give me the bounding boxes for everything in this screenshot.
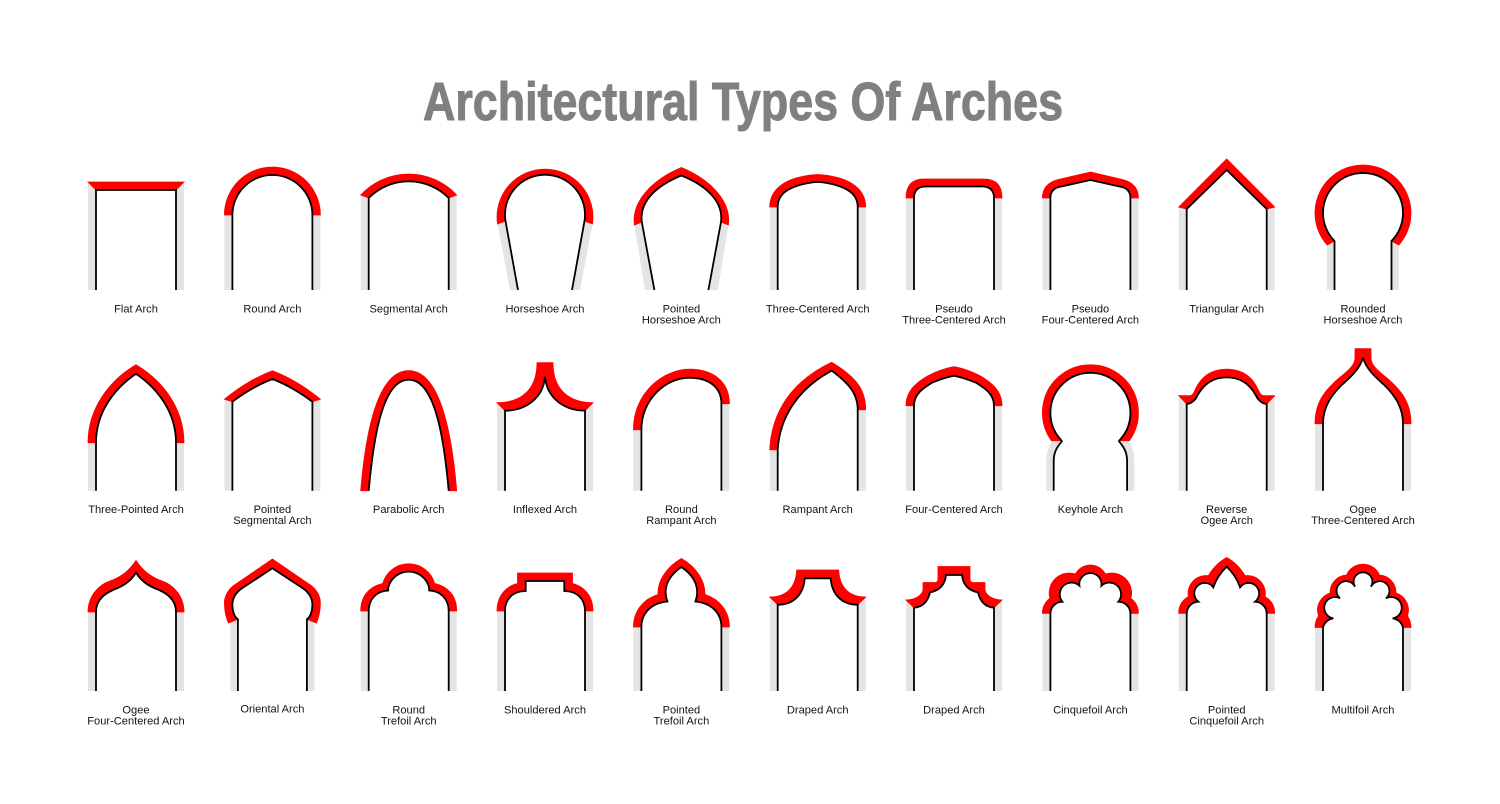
panel: Pseudo Three-Centered Arch: [902, 179, 1006, 327]
label: Ogee Arch: [1200, 515, 1253, 527]
arch drawing: reverse ogee: [1179, 369, 1275, 491]
label: Keyhole Arch: [1058, 504, 1123, 516]
label: Four-Centered Arch: [87, 716, 185, 728]
label: Reverse: [1206, 504, 1247, 516]
label: Pseudo: [935, 304, 973, 316]
label: Trefoil Arch: [654, 716, 709, 728]
arch drawing: ogee three-centered: [1315, 349, 1411, 491]
panel: Rounded Horseshoe Arch: [1315, 165, 1411, 327]
arch drawing: horseshoe: [497, 169, 593, 290]
arch drawing: pseudo three-centered: [906, 179, 1002, 290]
label: Round: [665, 504, 698, 516]
arch drawing: round rampant: [633, 369, 729, 491]
label: Parabolic Arch: [373, 504, 444, 516]
label: Three-Centered Arch: [902, 315, 1006, 327]
panel: Parabolic Arch: [361, 371, 457, 516]
label: Oriental Arch: [240, 704, 304, 716]
panel: Pseudo Four-Centered Arch: [1042, 172, 1139, 327]
arch drawing: triangular: [1179, 159, 1275, 290]
panel: Triangular Arch: [1179, 159, 1275, 316]
arch drawing: rampant: [770, 362, 866, 491]
label: Segmental Arch: [370, 304, 448, 316]
label: Ogee: [122, 704, 150, 716]
panel: Three-Centered Arch: [766, 174, 869, 316]
label: Pointed: [663, 304, 700, 316]
arch drawing: rounded horseshoe: [1315, 165, 1411, 290]
label: Three-Centered Arch: [1311, 515, 1415, 527]
label: Four-Centered Arch: [1042, 315, 1139, 327]
panel: Three-Pointed Arch: [88, 365, 184, 516]
arch drawing: draped two steps: [906, 566, 1002, 691]
panel: Reverse Ogee Arch: [1179, 369, 1275, 527]
arch drawing: keyhole: [1042, 365, 1138, 491]
panel: Rampant Arch: [770, 362, 866, 516]
label: Draped Arch: [787, 704, 849, 716]
label: Pointed: [1208, 704, 1246, 716]
label: Cinquefoil Arch: [1053, 704, 1128, 716]
arch drawing: three-centered: [770, 174, 866, 290]
panel: Pointed Segmental Arch: [224, 371, 320, 527]
panel: Pointed Horseshoe Arch: [634, 168, 729, 327]
panel: Oriental Arch: [224, 559, 320, 716]
label: Multifoil Arch: [1332, 704, 1394, 716]
arch drawing: shouldered: [497, 573, 593, 691]
label: Draped Arch: [923, 704, 985, 716]
arch drawing: inflexed: [497, 363, 593, 491]
panel: Keyhole Arch: [1042, 365, 1138, 516]
label: Segmental Arch: [233, 515, 312, 527]
arch drawing: pseudo four-centered: [1042, 172, 1138, 290]
arch drawing: cinquefoil: [1042, 565, 1138, 691]
label: Three-Pointed Arch: [88, 504, 184, 516]
arch drawing: pointed horseshoe: [634, 168, 729, 290]
panel: Pointed Cinquefoil Arch: [1179, 558, 1275, 728]
label: Pointed: [254, 504, 291, 516]
arch drawing: segmental: [361, 174, 457, 290]
arch drawing: flat: [88, 182, 184, 290]
panel: Draped Arch stepped: [906, 566, 1002, 716]
label: Four-Centered Arch: [905, 504, 1003, 516]
arch drawing: ogee four-centered: [88, 560, 184, 691]
arch drawing: pointed segmental: [224, 371, 320, 491]
panel: Cinquefoil Arch: [1042, 565, 1138, 716]
label: Cinquefoil Arch: [1189, 716, 1264, 728]
label: Pointed: [663, 704, 700, 716]
panel: Horseshoe Arch: [497, 169, 593, 316]
label: Rampant Arch: [646, 515, 717, 527]
arch drawing: draped one step: [770, 570, 866, 691]
label: Round Arch: [243, 304, 301, 316]
panel: Segmental Arch: [361, 174, 457, 316]
arch drawing: parabolic: [361, 371, 457, 491]
arch drawing: pointed trefoil: [633, 558, 729, 691]
label: Shouldered Arch: [504, 704, 586, 716]
arch drawing: three-pointed: [88, 365, 184, 491]
label: Flat Arch: [114, 304, 158, 316]
arch drawing: multifoil: [1315, 564, 1411, 691]
panel: Round Rampant Arch: [633, 369, 729, 527]
label: Horseshoe Arch: [642, 315, 721, 327]
arch drawing: four-centered: [906, 367, 1002, 491]
arch drawing: round trefoil: [361, 564, 457, 691]
arch drawing: oriental: [224, 559, 320, 691]
label: Three-Centered Arch: [766, 304, 869, 316]
label: Horseshoe Arch: [506, 304, 584, 316]
label: Rampant Arch: [783, 504, 853, 516]
label: Horseshoe Arch: [1324, 315, 1402, 327]
panel: Round Trefoil Arch: [361, 564, 457, 728]
panel: Pointed Trefoil Arch: [633, 558, 729, 728]
panel: Inflexed Arch: [497, 363, 593, 516]
label: Pseudo: [1072, 304, 1109, 316]
panel: Shouldered Arch: [497, 573, 593, 716]
panel: Flat Arch: [88, 182, 184, 316]
label: Triangular Arch: [1189, 304, 1264, 316]
label: Round: [392, 704, 425, 716]
panel: Round Arch: [224, 167, 320, 316]
label: Ogee: [1349, 504, 1377, 516]
label: Trefoil Arch: [381, 716, 437, 728]
panel: Multifoil Arch: [1315, 564, 1411, 716]
panel: Four-Centered Arch: [905, 367, 1003, 516]
arch drawing: round: [224, 167, 320, 290]
title: Architectural Types Of Arches: [423, 72, 1063, 132]
label: Rounded: [1340, 304, 1386, 316]
panel: Ogee Four-Centered Arch: [87, 560, 185, 728]
panel: Ogee Three-Centered Arch: [1311, 349, 1415, 527]
arch drawing: pointed cinquefoil: [1179, 558, 1275, 691]
panel: Draped Arch: [770, 570, 866, 716]
label: Inflexed Arch: [513, 504, 577, 516]
